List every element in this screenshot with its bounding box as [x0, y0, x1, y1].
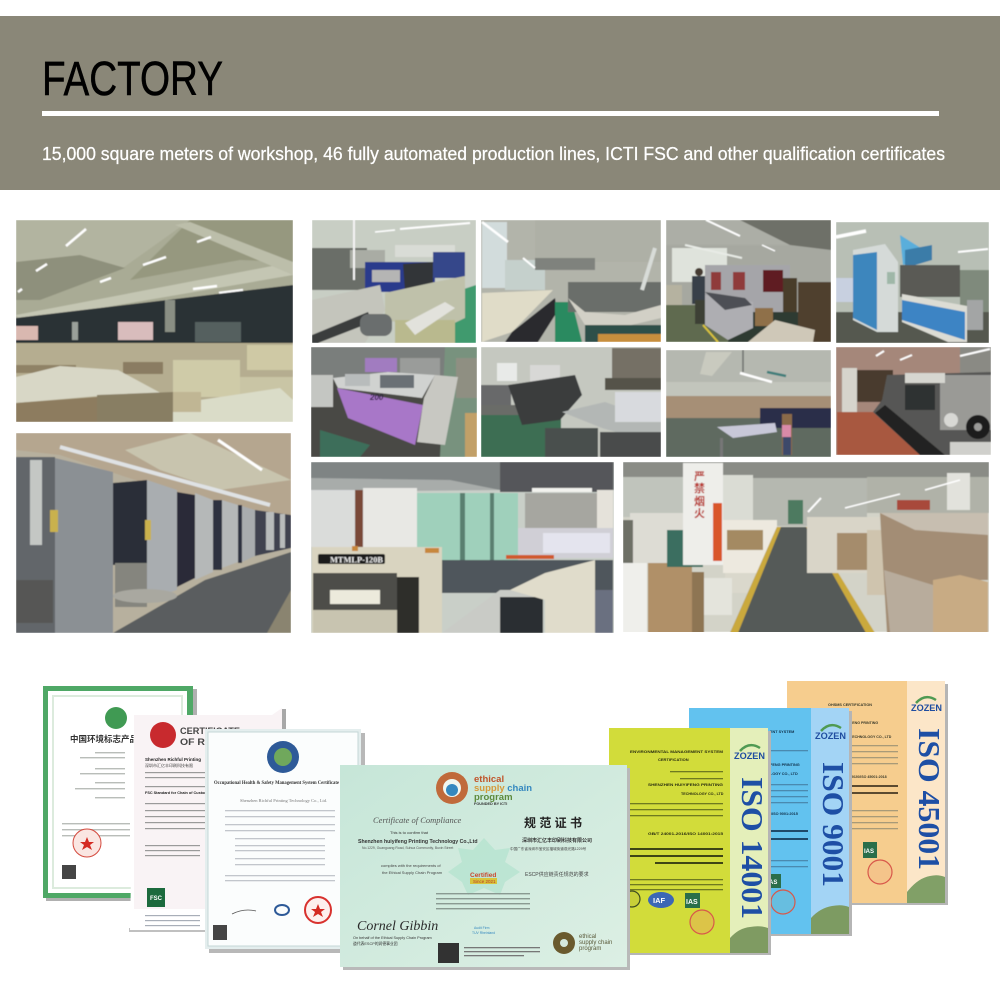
- certificate: ethical supply chain compliance: complies with the requirements of: [381, 863, 441, 868]
- certificate: ISO 14001: ISO 14001: [735, 777, 770, 919]
- certificate: OHSMS ISO 45001: -2020/ISO 45001:2018: [850, 775, 887, 779]
- title: FACTORY: [42, 53, 223, 106]
- certificate: ISO 9001: AS: [769, 880, 777, 886]
- certificate: ethical supply chain compliance: Audit Firm: [474, 926, 490, 930]
- photo: MTMLP laminating machine: [311, 462, 614, 633]
- certificate: ISO 9001: /ISO 9001:2015: [771, 812, 798, 816]
- certificate: ethical supply chain compliance: 中国广东省深圳市宝安区福城街道观光路1229号: [510, 846, 587, 851]
- certificate: FSC chain of custody: CERTIFICATE: [180, 726, 240, 737]
- photo: offset printing press: [16, 433, 291, 633]
- certificate: ethical supply chain compliance: 道代表ESCP的润德事业团: [353, 941, 398, 946]
- certificate: OHSMS ISO 45001: FENG PRINTING: [850, 721, 878, 725]
- certificate: OHSMS ISO 45001: ISO 45001: [912, 728, 947, 870]
- IAF logo: IAF: [653, 896, 666, 905]
- certificate: ISO 9001: FENG PRINTING: [770, 763, 800, 767]
- machine label: MTMLP-120B: [330, 554, 383, 564]
- certificate: ethical supply chain compliance: Since 2021: [473, 879, 496, 884]
- certificate: China environmental label: [43, 686, 197, 901]
- certificate: ISO 9001: [689, 708, 852, 936]
- certificate: ethical supply chain compliance: Shenzhen huiyifeng Printing Technology Co.,Ltd: [358, 839, 478, 845]
- IAS logo: [685, 893, 700, 908]
- certificate: ethical supply chain compliance: ethical: [579, 934, 596, 940]
- IAF logo: [648, 892, 674, 908]
- certificate: FSC chain of custody: 深圳市汇亿丰印刷科技有限: [145, 762, 193, 768]
- certificate: OHSMS ISO 45001: TECHNOLOGY CO., LTD: [850, 735, 892, 739]
- certificate: ethical supply chain compliance: TUV Rheinland: [472, 931, 495, 935]
- certificate: ISO 14001: ZOZEN: [734, 751, 765, 761]
- photo: folding equipment: [481, 347, 661, 457]
- certificate: ISO 14001: ENVIRONMENTAL MANAGEMENT SYSTEM: [630, 749, 724, 754]
- certificate: occupational health and safety: [205, 729, 365, 953]
- certificate: ethical supply chain compliance: Certified: [470, 872, 496, 879]
- certificate: ethical supply chain compliance: ethical: [474, 774, 504, 785]
- certificate: ISO 9001: ISO 9001: [816, 762, 851, 887]
- certificate: ethical supply chain compliance: On behalf of the Ethical Supply Chain Program: [353, 936, 432, 940]
- certificate: ethical supply chain compliance: Certificate of Compliance: [373, 815, 462, 825]
- certificate: ISO 14001: CERTIFICATION: [658, 757, 689, 762]
- certificate: OHSMS ISO 45001: [787, 681, 948, 905]
- certificate: ethical supply chain compliance: Cornel Gibbin: [357, 919, 438, 934]
- photo: printing line on red floor: [836, 347, 991, 455]
- certificate: ethical supply chain compliance: program: [579, 946, 601, 952]
- IAS logo: IAS: [686, 899, 698, 906]
- certificate: FSC chain of custody: FSC Standard for Chain of Custody: [145, 791, 210, 795]
- photo: blue folding machine: [836, 222, 989, 343]
- photo: purple sewing machine: 200: [369, 393, 384, 402]
- certificate: FSC chain of custody: Shenzhen Richful Printing: [145, 757, 201, 762]
- certificate: OHSMS ISO 45001: OHSMS CERTIFICATION: [828, 703, 872, 707]
- pillar with safety slogan: 烟: [694, 495, 705, 508]
- pillar with safety slogan: [683, 463, 723, 565]
- certificate: occupational health and safety: Shenzhen Richful Printing Technology Co., Ltd.: [240, 798, 327, 804]
- certificate: ISO 9001: LOGY CO., LTD: [770, 772, 798, 776]
- certificate: ISO 14001: SHENZHEN HUIYIFENG PRINTING: [648, 782, 723, 787]
- photo: paper stacks in print hall: [16, 220, 293, 422]
- photo: packing workshop: [666, 350, 831, 457]
- certificate: ethical supply chain compliance: 深圳市汇亿丰印刷科技有限公司: [522, 837, 592, 844]
- photo: conveyor production line: [481, 220, 661, 342]
- photo: warehouse aisle: [623, 462, 989, 632]
- certificate: ethical supply chain compliance: the Ethical Supply Chain Program: [382, 870, 443, 875]
- pillar with safety slogan: 严: [694, 470, 705, 483]
- certificate: ethical supply chain compliance: [340, 765, 630, 970]
- pillar with safety slogan: 火: [694, 507, 705, 520]
- certificate: FSC chain of custody: OF REG: [180, 737, 220, 748]
- header banner: [0, 16, 1000, 190]
- photo: worker at machine: [666, 220, 831, 342]
- certificate: ISO 9001: ZOZEN: [815, 731, 846, 741]
- pillar with safety slogan: 禁: [694, 481, 705, 495]
- certificate: ethical supply chain compliance: 规 范 证 书: [524, 815, 582, 830]
- photo: purple sewing machine: [311, 347, 477, 457]
- certificate: OHSMS ISO 45001: IAS: [864, 849, 874, 855]
- certificate: OHSMS ISO 45001: ZOZEN: [911, 703, 942, 713]
- certificate: ethical supply chain compliance: supply chain: [474, 783, 532, 794]
- certificate: ethical supply chain compliance: No.1229, Guanguang Road, Suhua Community, Buxin Street: [362, 846, 453, 850]
- certificate: ISO 14001: [609, 728, 771, 955]
- photo: blue binding machine: [312, 220, 476, 343]
- certificate: ethical supply chain compliance: This is to confirm that: [390, 830, 429, 835]
- certificate: China environmental label: 中国环境标志产品: [70, 734, 138, 744]
- certificate: ethical supply chain compliance: ESCP供应链责任规范的要求: [525, 871, 589, 878]
- certificate: ethical supply chain compliance: supply chain: [579, 940, 612, 946]
- certificate: ISO 14001: GB/T 24001-2016/ISO 14001:2015: [648, 831, 724, 836]
- subtitle: 15,000 square meters of workshop, 46 fully automated production lines, ICTI FSC and other qualification certificates: [42, 144, 945, 164]
- certificate: ethical supply chain compliance: FOUNDED BY ICTI: [474, 802, 507, 806]
- certificate: ISO 9001: ENT SYSTEM: [770, 730, 794, 734]
- certificate: FSC chain of custody: [129, 708, 286, 932]
- certificate: FSC chain of custody: FSC: [150, 896, 163, 902]
- certificate: occupational health and safety: Occupational Health & Safety Management System Certificate: [214, 780, 340, 786]
- certificate: ethical supply chain compliance: program: [474, 792, 513, 803]
- certificate: ISO 14001: TECHNOLOGY CO., LTD: [681, 792, 724, 796]
